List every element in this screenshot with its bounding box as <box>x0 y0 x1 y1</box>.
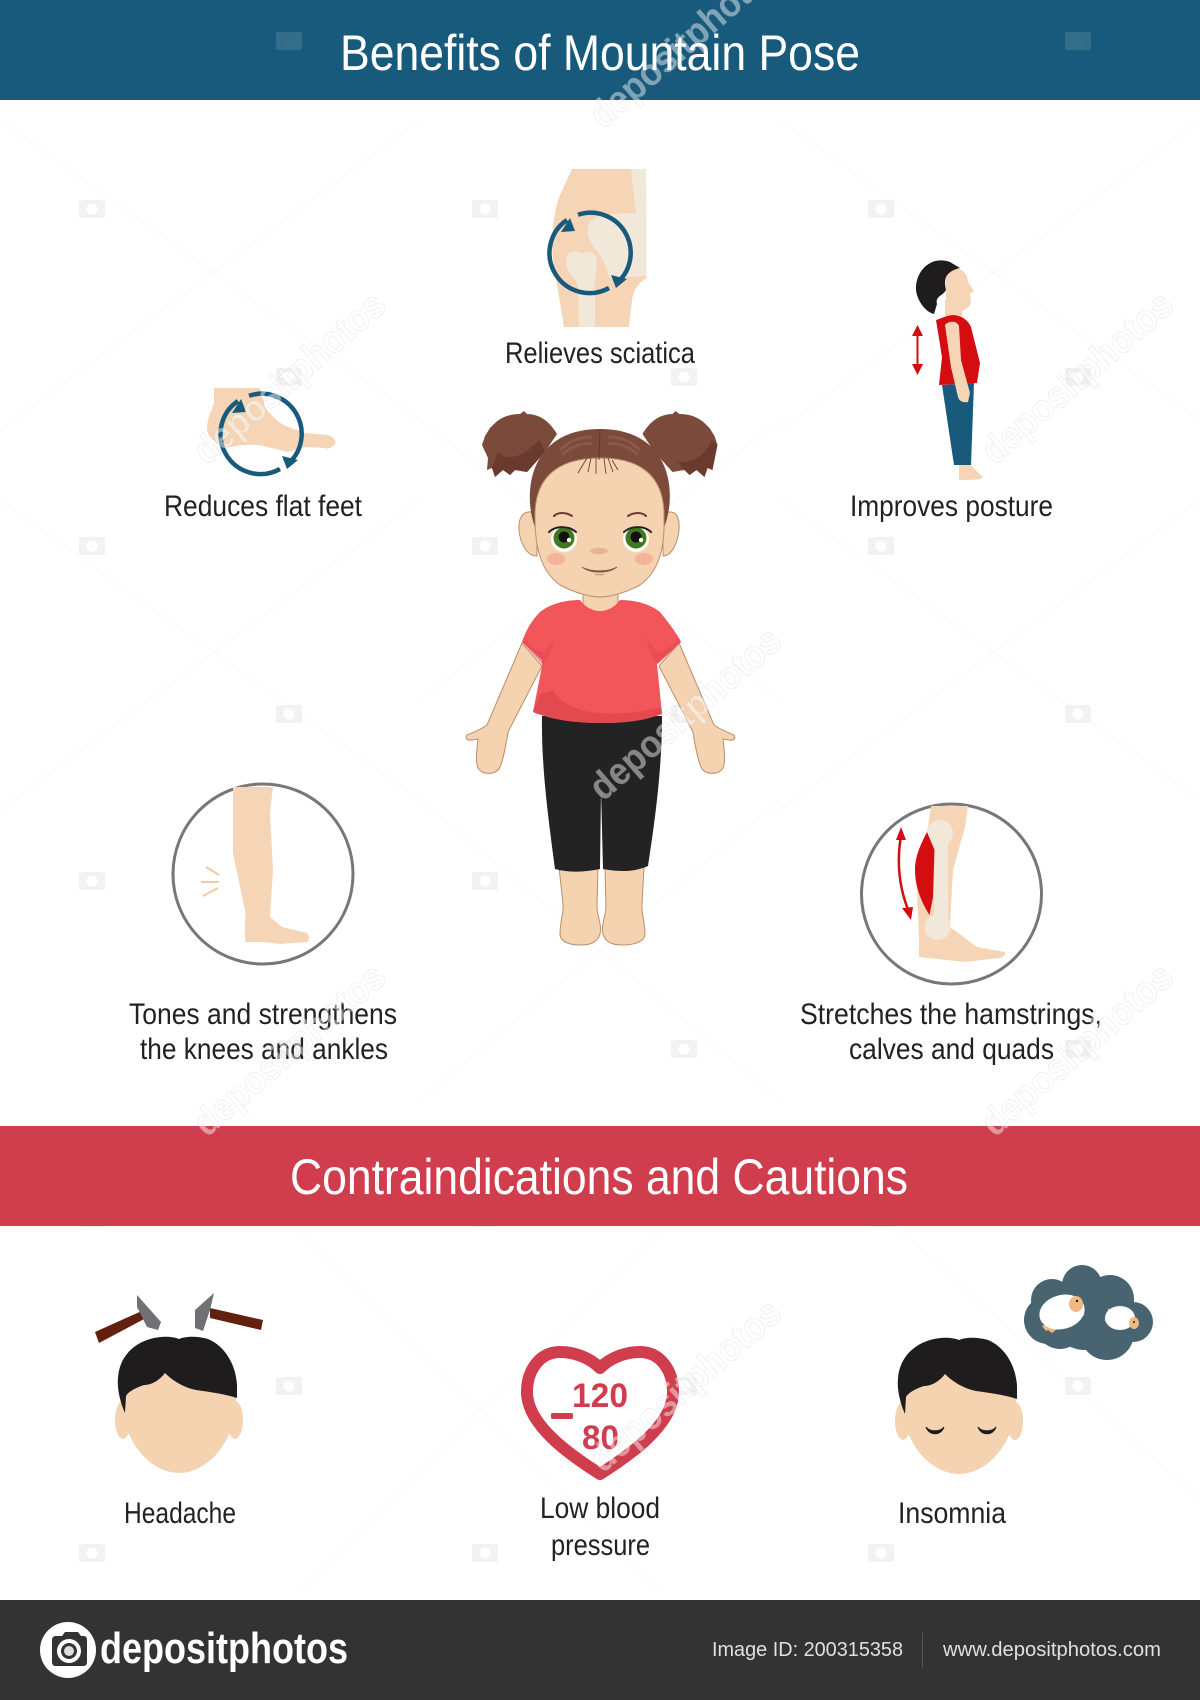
icon: sleeping head, insomnia <box>895 1338 1023 1474</box>
icon: leg in circle, knees and ankles <box>173 784 353 964</box>
face <box>535 458 664 597</box>
logo wordmark: depositphotos <box>100 1624 348 1673</box>
illustration: girl in mountain pose <box>466 411 735 945</box>
title: Benefits of Mountain Pose: Benefits of Mountain Pose <box>340 25 860 81</box>
hair parting and fringe <box>560 430 640 474</box>
left hair bun <box>482 411 557 477</box>
logo: camera in circle <box>40 1622 96 1678</box>
watermarks <box>185 0 1182 1481</box>
watermarks: depositphotos <box>581 1292 790 1481</box>
arms and hands <box>466 643 735 773</box>
label: Stretches the hamstrings, calves and quads: calves and quads <box>849 1033 1054 1066</box>
legs and feet <box>559 867 645 945</box>
right hair bun <box>642 411 718 477</box>
nose, cheeks and mouth <box>547 548 653 575</box>
header band: benefits <box>0 0 1200 100</box>
label: Improves posture: Improves posture <box>850 490 1053 523</box>
watermarks: depositphotos <box>973 284 1182 473</box>
hair cap <box>530 429 670 532</box>
label: Low blood pressure <box>540 1492 660 1562</box>
label: Low blood pressure: Low blood <box>540 1492 660 1525</box>
label: Tones and strengthens the knees and ankles: the knees and ankles <box>140 1033 388 1066</box>
label: Tones and strengthens the knees and ankles <box>129 998 397 1066</box>
black capri pants <box>542 716 662 872</box>
hammers <box>95 1293 263 1343</box>
label: Headache: Headache <box>124 1497 236 1530</box>
label: Stretches the hamstrings, calves and quads <box>800 998 1102 1066</box>
footer band <box>0 1600 1200 1700</box>
label: Reduces flat feet: Reduces flat feet <box>164 490 363 523</box>
header band: contraindications <box>0 1126 1200 1226</box>
watermarks: depositphotos <box>185 284 394 473</box>
icon: heart with blood pressure values <box>527 1352 673 1474</box>
lashes and brows <box>549 513 651 532</box>
watermarks: depositphotos <box>581 620 790 809</box>
icon: head with hammers, headache <box>95 1293 263 1473</box>
ears <box>519 512 679 556</box>
sheep <box>1035 1290 1139 1334</box>
title: Contraindications and Cautions: Contraindications and Cautions <box>290 1149 908 1205</box>
eyes <box>551 526 649 552</box>
image id: Image ID: 200315358 <box>712 1639 903 1661</box>
icon: heart with blood pressure values: 120 <box>572 1377 628 1415</box>
label: Relieves sciatica: Relieves sciatica <box>505 337 695 370</box>
label: Stretches the hamstrings, calves and quads: Stretches the hamstrings, <box>800 998 1102 1031</box>
icon: lower leg muscle in circle with stretch arrow <box>862 804 1042 984</box>
icon: thought cloud with sheep <box>1024 1265 1153 1360</box>
neck <box>580 585 622 612</box>
watermarks: depositphotos <box>973 956 1182 1145</box>
icon: child in profile with posture arrow <box>912 260 983 480</box>
icon: hip joint with rotation arrows <box>549 169 646 327</box>
icon: heart with blood pressure values: 80 <box>582 1419 619 1457</box>
red t-shirt <box>522 600 681 723</box>
website url: www.depositphotos.com <box>942 1639 1161 1661</box>
label: Tones and strengthens the knees and ankles: Tones and strengthens <box>129 998 397 1031</box>
label: Low blood pressure: pressure <box>551 1529 650 1562</box>
icon: foot with rotation arrows <box>207 388 335 474</box>
watermarks: depositphotos <box>185 956 394 1145</box>
label: Insomnia: Insomnia <box>898 1497 1006 1530</box>
